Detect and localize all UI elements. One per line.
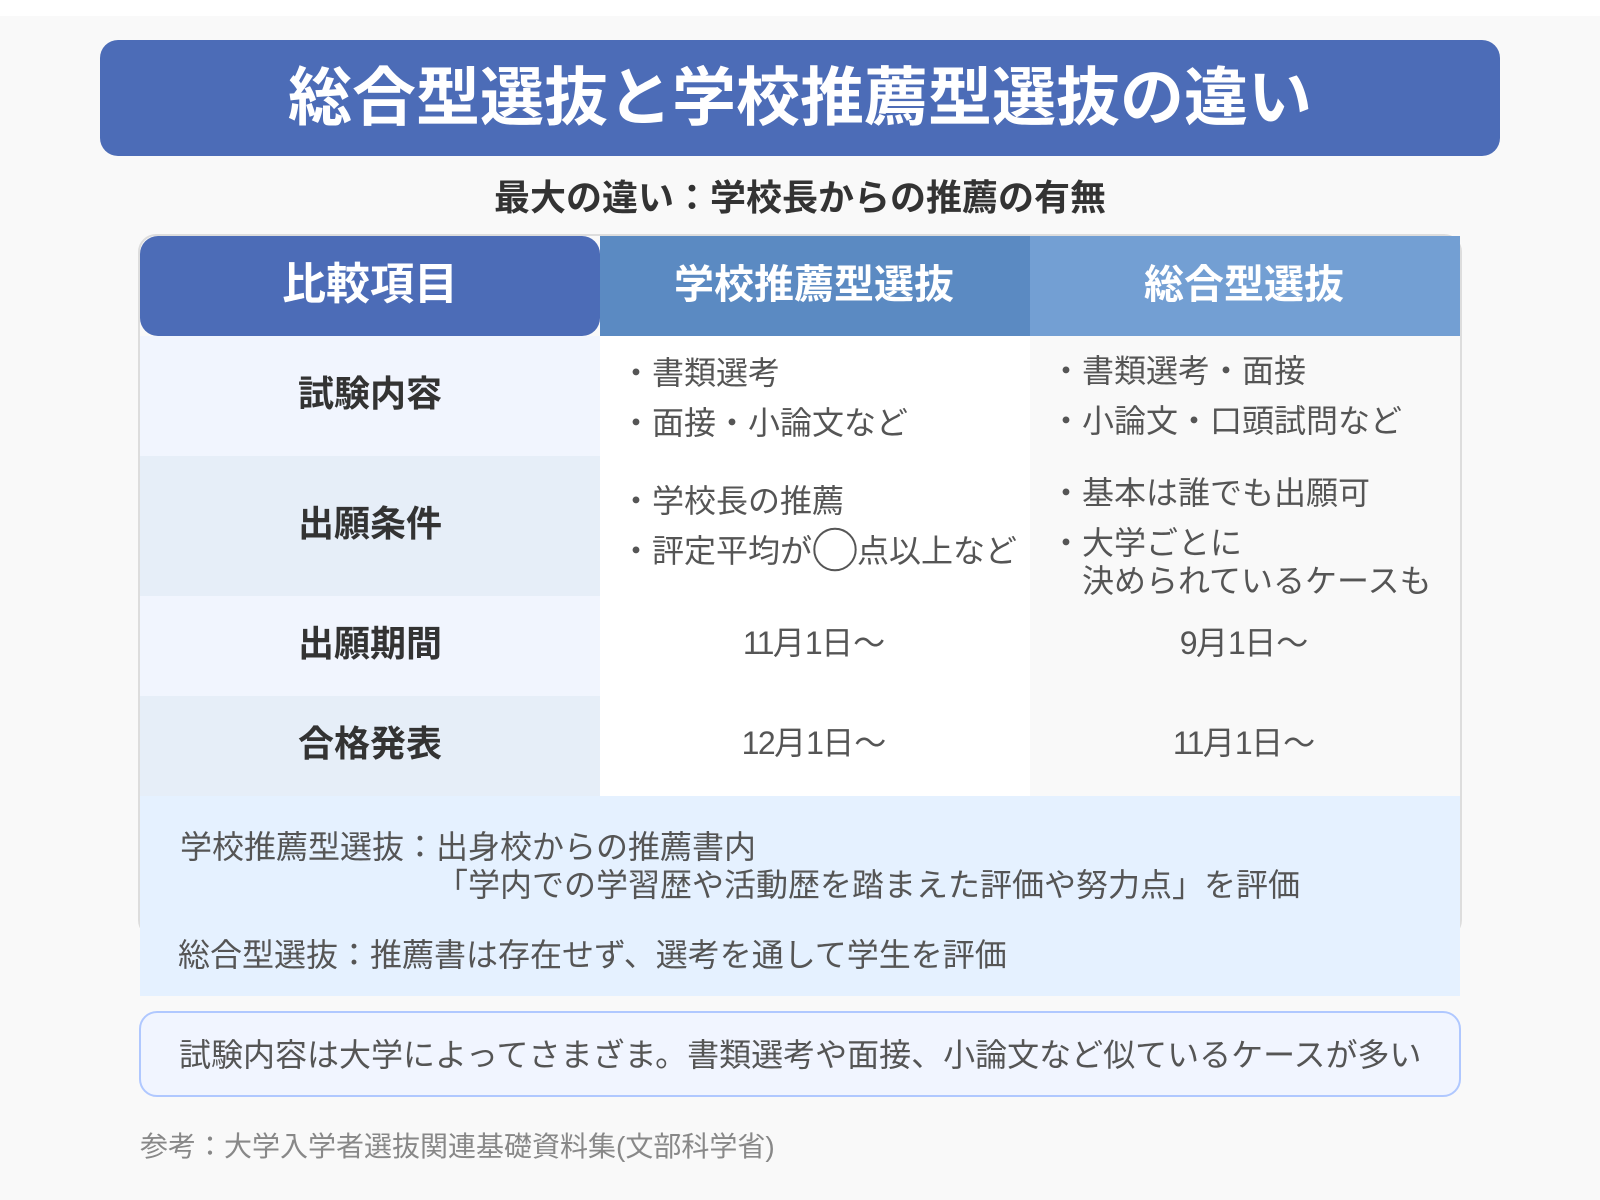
panel: explanatory notes <box>140 796 1460 996</box>
row label: application period: 出願期間 <box>298 623 442 664</box>
header: comprehensive selection: 総合型選抜 <box>1144 263 1344 307</box>
note: school recommendation continuation: 「学内での学習歴や活動歴を踏まえた評価や努力点」を評価 <box>436 867 1300 903</box>
cell: school conditions <box>620 483 1017 577</box>
source note: 参考：大学入学者選抜関連基礎資料集(文部科学省) <box>140 1131 775 1162</box>
item: ・書類選考・面接 <box>1050 353 1306 389</box>
row label: application period <box>140 596 600 696</box>
cell: comprehensive conditions <box>1050 475 1431 599</box>
title banner <box>100 40 1500 156</box>
note: comprehensive selection: 総合型選抜：推薦書は存在せず、選考を通して学生を評価 <box>178 937 1007 973</box>
cell: school application period: 11月1日～ <box>743 625 885 661</box>
row label: application conditions: 出願条件 <box>298 503 442 544</box>
note: school recommendation: 学校推薦型選抜：出身校からの推薦書内 <box>180 829 756 865</box>
callout text: 試験内容は大学によってさまざま。書類選考や面接、小論文など似ているケースが多い <box>179 1037 1422 1073</box>
column background: school recommendation <box>600 336 1030 796</box>
title banner: 総合型選抜と学校推薦型選抜の違い <box>288 62 1312 134</box>
row label: application conditions <box>140 456 600 596</box>
header: comparison item <box>140 236 600 336</box>
cell: comprehensive application period: 9月1日～ <box>1180 625 1308 661</box>
callout <box>139 1011 1461 1097</box>
row label: exam content: 試験内容 <box>298 373 442 414</box>
cell: school exam content <box>620 355 908 441</box>
header: comparison item: 比較項目 <box>282 260 458 309</box>
cell: comprehensive results date: 11月1日～ <box>1173 725 1315 761</box>
header: school recommendation: 学校推薦型選抜 <box>674 263 954 307</box>
header: comprehensive selection <box>1030 236 1460 336</box>
table frame <box>138 234 1462 938</box>
item: ・書類選考 <box>620 355 780 391</box>
item continuation: 決められているケースも <box>1082 563 1431 599</box>
cell: school results date: 12月1日～ <box>742 725 886 761</box>
item: ・評定平均が 点以上など <box>620 533 1017 569</box>
row label: exam content <box>140 336 600 456</box>
item: ・面接・小論文など <box>620 405 908 441</box>
cell: comprehensive exam content <box>1050 353 1402 439</box>
item: ・大学ごとに <box>1050 525 1242 561</box>
item: ・学校長の推薦 <box>620 483 844 519</box>
item: ・小論文・口頭試問など <box>1050 403 1402 439</box>
column background: comprehensive <box>1030 336 1460 796</box>
row label: results announcement: 合格発表 <box>298 723 442 764</box>
item <box>620 525 1017 577</box>
row label: results announcement <box>140 696 600 796</box>
header: school recommendation <box>600 236 1030 336</box>
subtitle: 最大の違い：学校長からの推薦の有無 <box>494 177 1106 218</box>
panel: comparison table <box>138 234 1462 928</box>
item: ・基本は誰でも出願可 <box>1050 475 1370 511</box>
item: ◯ <box>812 525 858 577</box>
